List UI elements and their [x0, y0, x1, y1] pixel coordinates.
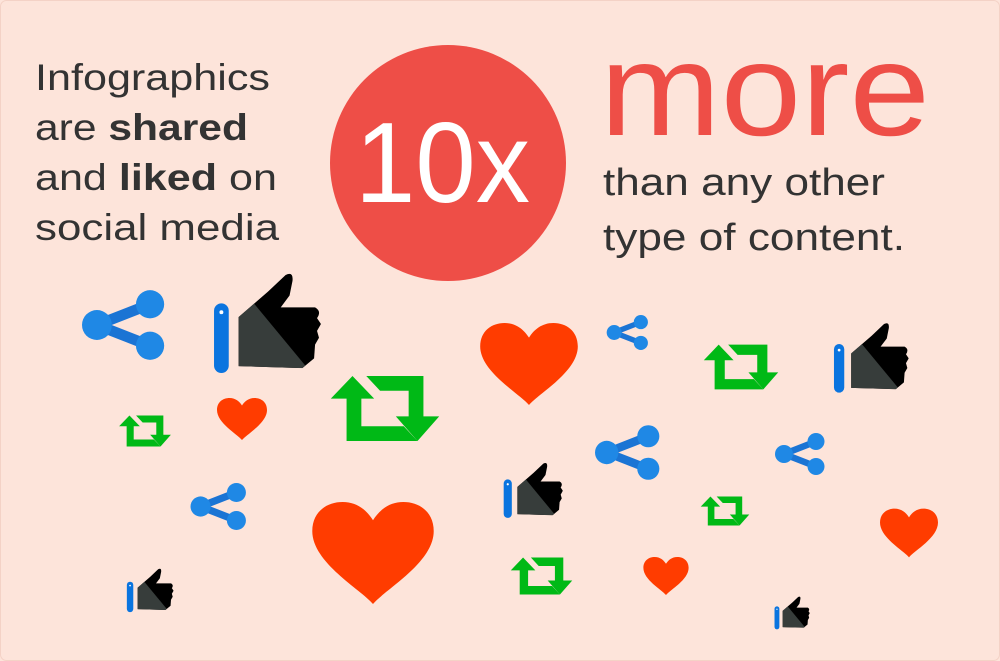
icons: hearts: [217, 323, 938, 604]
text block: left statement: and liked on: [35, 157, 277, 198]
text block: right statement: than any other: [603, 162, 885, 204]
text block: left statement: [35, 57, 279, 248]
text block: right statement: type of content.: [603, 217, 905, 259]
text block: left statement: are shared: [35, 107, 248, 148]
red circle with 10x: [330, 45, 566, 281]
icons: share: [82, 290, 824, 530]
red circle with 10x: 10x: [355, 100, 530, 227]
text block: left statement: Infographics: [35, 57, 270, 98]
text block: left statement: social media: [35, 207, 279, 248]
heading: more: more: [600, 16, 930, 163]
icons: retweet: [119, 345, 778, 594]
text block: right statement: [603, 162, 905, 259]
icons: thumbs up: [126, 272, 912, 630]
